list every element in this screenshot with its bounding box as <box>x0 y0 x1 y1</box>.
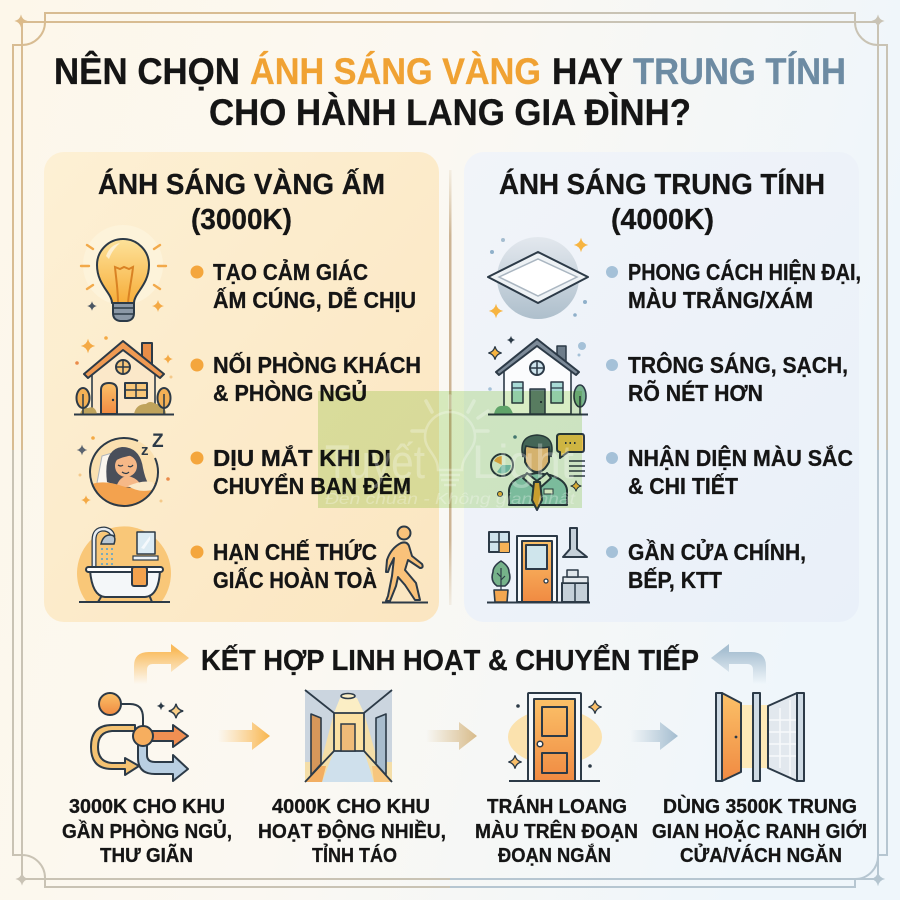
icon: person with speech bubbles <box>491 434 585 510</box>
arrow: step 3 to 4 <box>630 722 678 750</box>
step 4: door and partition <box>652 693 867 867</box>
bullet text: neutral 3 <box>606 444 853 499</box>
arrow: top right curved <box>711 644 766 684</box>
bullet text: neutral 2: TRÔNG SÁNG, SẠCH, <box>628 351 848 378</box>
bullet text: neutral 1: PHONG CÁCH HIỆN ĐẠI, <box>628 258 861 285</box>
icon: sleeping person: Z <box>152 431 164 452</box>
caption 4: DÙNG 3500K TRUNG <box>663 794 857 818</box>
caption 2 <box>258 796 446 867</box>
section heading: KẾT HỢP LINH HOẠT & CHUYỂN TIẾP <box>201 643 699 677</box>
title: HAY <box>552 51 623 92</box>
caption 4: CỬA/VÁCH NGĂN <box>680 843 842 867</box>
bullet text: neutral 1: MÀU TRẮNG/XÁM <box>628 286 813 313</box>
bullet text: neutral 4: BẾP, KTT <box>628 566 722 593</box>
panel heading: neutral: ÁNH SÁNG TRUNG TÍNH <box>499 167 825 201</box>
icon: door with glow <box>508 693 602 781</box>
icon: sleeping person <box>77 431 170 507</box>
title <box>54 50 846 133</box>
bullet text: neutral 3: NHẬN DIỆN MÀU SẮC <box>628 444 853 471</box>
bullet text: neutral 1 <box>606 258 861 313</box>
bullet text: warm 3: CHUYỂN BAN ĐÊM <box>213 472 411 499</box>
bullet text: warm 4: HẠN CHẾ THỨC <box>213 538 377 565</box>
title: NÊN CHỌN <box>54 50 240 92</box>
panel: neutral light 4000K <box>464 152 861 622</box>
caption 1: THƯ GIÃN <box>100 844 193 867</box>
panel heading: warm: (3000K) <box>191 204 292 236</box>
icon: door and partition wall <box>716 693 804 781</box>
icon: sleeping person: z <box>141 442 148 459</box>
bullet text: warm 1: TẠO CẢM GIÁC <box>213 257 368 285</box>
caption 3: TRÁNH LOANG <box>487 795 627 818</box>
icon: bathtub <box>77 526 171 602</box>
arrow: step 2 to 3 <box>426 722 477 750</box>
icon: light bulb <box>81 225 166 321</box>
icon: branching arrows <box>91 693 188 781</box>
icon: modern house <box>488 336 588 414</box>
caption 2: TỈNH TÁO <box>312 844 397 867</box>
watermark: Đèn chuẩn - Không gian nhất <box>325 490 576 508</box>
title: CHO HÀNH LANG GIA ĐÌNH? <box>209 92 691 133</box>
bullet text: neutral 3: & CHI TIẾT <box>628 472 738 499</box>
panel heading: neutral: (4000K) <box>611 204 714 236</box>
bullet text: warm 3 <box>190 444 411 499</box>
bullet text: warm 3: DỊU MẮT KHI DI <box>213 444 391 471</box>
bullet text: warm 2: NỐI PHÒNG KHÁCH <box>213 351 421 378</box>
icon: ceiling panel light <box>488 237 588 319</box>
bullet text: neutral 4 <box>606 537 806 593</box>
bullet text: neutral 2: RÕ NÉT HƠN <box>628 379 763 406</box>
watermark: Light <box>472 435 574 488</box>
arrow: top left curved <box>134 644 189 684</box>
arrow: step 1 to 2 <box>218 722 270 750</box>
title: TRUNG TÍNH <box>633 51 846 92</box>
caption 2: 4000K CHO KHU <box>272 796 430 818</box>
icon: lit corridor <box>305 690 392 790</box>
caption 1 <box>62 796 232 867</box>
icon: walking person <box>382 526 428 602</box>
bullet text: neutral 4: GẦN CỬA CHÍNH, <box>628 537 806 565</box>
panel heading: warm <box>98 167 385 236</box>
caption 2: HOẠT ĐỘNG NHIỀU, <box>258 819 446 843</box>
bullet text: warm 1 <box>190 257 416 313</box>
bullet text: neutral 2 <box>606 351 848 406</box>
step 1: mix of paths <box>62 693 232 867</box>
icon: front door and kitchen <box>487 528 590 602</box>
caption 3: MÀU TRÊN ĐOẠN <box>475 819 638 843</box>
panel divider <box>449 170 452 605</box>
caption 3 <box>475 795 638 867</box>
bullet text: warm 4: GIẤC HOÀN TOÀ <box>213 566 377 593</box>
icon: warm house <box>74 336 174 414</box>
caption 1: 3000K CHO KHU <box>69 796 225 818</box>
step 2: corridor <box>258 690 446 867</box>
caption 3: ĐOẠN NGẮN <box>498 843 611 867</box>
caption 4 <box>652 794 867 867</box>
panel heading: warm: ÁNH SÁNG VÀNG ẤM <box>98 167 385 201</box>
title: ÁNH SÁNG VÀNG <box>250 51 541 92</box>
watermark: Tuyết <box>325 435 425 488</box>
caption 1: GẦN PHÒNG NGỦ, <box>62 819 232 843</box>
bullet text: warm 1: ẤM CÚNG, DỄ CHỊU <box>213 285 416 313</box>
panel: warm light 3000K <box>44 152 439 622</box>
watermark <box>318 391 582 508</box>
bullet text: warm 4 <box>190 538 377 593</box>
bullet text: warm 2: & PHÒNG NGỦ <box>213 378 367 406</box>
step 3: door <box>475 693 638 867</box>
caption 4: GIAN HOẶC RANH GIỚI <box>652 819 867 843</box>
bullet text: warm 2 <box>190 351 421 406</box>
panel heading: neutral <box>499 167 825 236</box>
